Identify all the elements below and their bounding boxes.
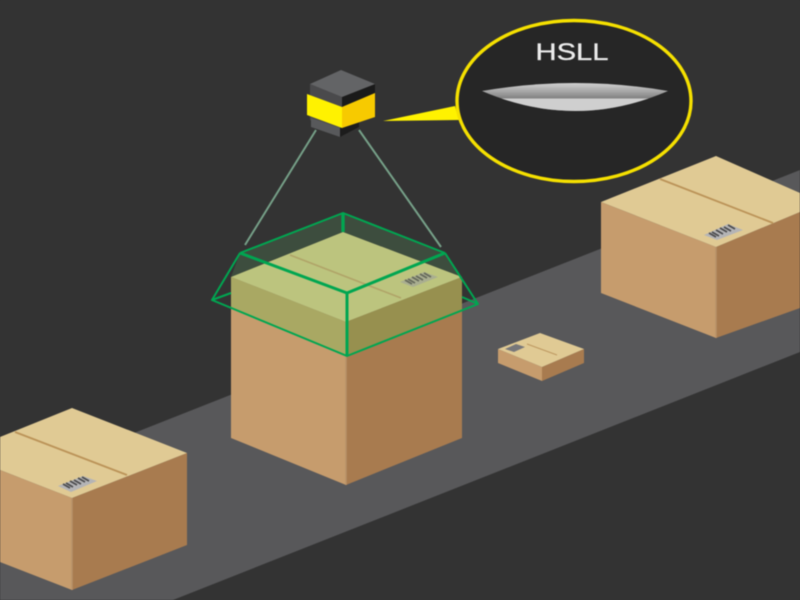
icon: sensor <box>307 70 375 137</box>
barcode label <box>58 476 97 492</box>
box: small on belt <box>498 333 584 381</box>
tinted top face <box>231 232 462 322</box>
lens profile <box>482 83 668 111</box>
barcode label <box>400 272 438 287</box>
green scan volume <box>212 213 478 356</box>
callout label: HSLL <box>536 39 608 66</box>
tinted left band <box>231 277 346 356</box>
box: right <box>601 156 800 338</box>
callout pointer <box>383 106 459 121</box>
callout bubble <box>457 20 691 182</box>
box: centre under scan <box>231 213 462 485</box>
tinted right band <box>346 277 462 356</box>
barcode label <box>704 224 743 240</box>
box: left <box>0 408 187 590</box>
light beams <box>245 130 441 247</box>
conveyor belt <box>0 170 800 600</box>
scan back tint <box>231 213 462 277</box>
